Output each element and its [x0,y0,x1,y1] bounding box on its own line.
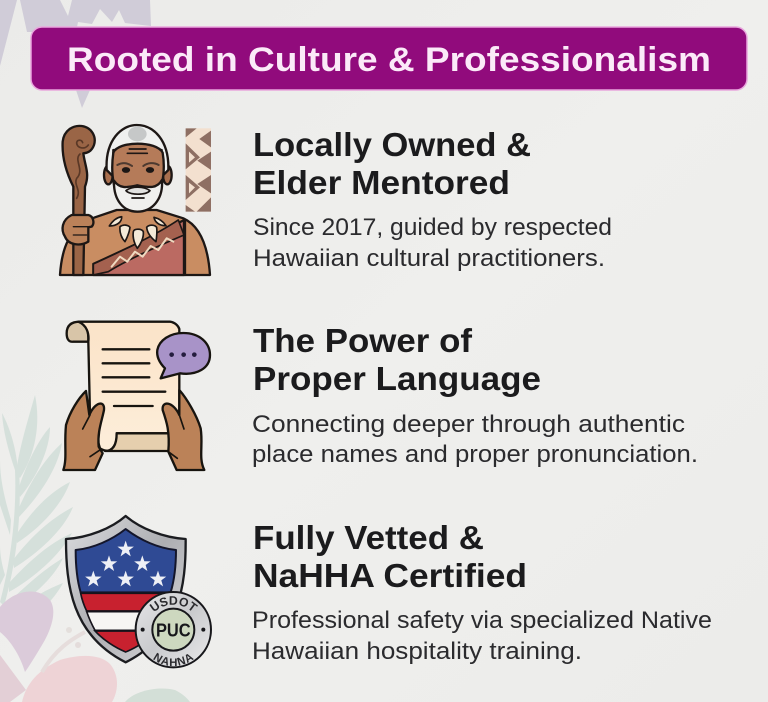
left hand [63,391,104,470]
title banner [31,27,747,90]
face [112,144,164,197]
staff [63,126,95,275]
arm line [181,220,188,275]
body: connecting deeper: Connecting deeper through authentic [252,411,685,438]
round PUC seal [134,591,212,668]
speech bubble [157,333,210,378]
shield frame [66,516,186,662]
body: professional safety: Professional safety via specialized Native [252,607,712,634]
section 1 text [253,126,612,272]
hand [63,215,93,244]
stripes [81,593,171,611]
section 2 text: place names and proper pronunciation. [252,441,698,468]
beard [114,180,162,212]
decorative palm frond [0,395,73,630]
bottom fold [105,433,169,451]
decorative hibiscus flower [0,592,190,702]
decorative top-left leaf [0,0,151,108]
round PUC seal: PUC [156,620,191,641]
red sash [93,220,184,275]
right hand [163,390,204,470]
section 3 text [252,519,712,665]
blue canton [76,529,176,592]
tooth necklace [109,217,166,248]
heading: locally owned: Locally Owned & [253,126,531,163]
body and shoulders [60,210,210,275]
stars [85,541,166,586]
heading: proper language: The Power of [253,322,473,359]
hair [107,125,168,177]
section 3 text: NaHHA Certified [253,557,527,594]
text lines [103,349,165,406]
round PUC seal: NAHNA [153,652,194,666]
body: since 2017: Since 2017, guided by respected [253,214,612,241]
section 2 text [252,322,698,468]
scroll curl [67,322,88,342]
title: Rooted in Culture & Professionalism [67,41,711,79]
icon: tribal pattern strip [186,128,211,212]
icon: Hawaiian elder with staff [60,125,210,275]
ears [104,166,113,184]
section 2 text: Proper Language [253,360,541,397]
icon: scroll held in hands with speech bubble [63,322,210,470]
round PUC seal: USDOT [149,596,198,611]
section 1 text: Elder Mentored [253,164,510,201]
section 3 text: Hawaiian hospitality training. [252,638,582,665]
icon: safety shield with stars and stripes [64,514,212,668]
section 1 text: Hawaiian cultural practitioners. [253,245,605,272]
paper [78,322,179,451]
heading: NaHHA certified: Fully Vetted & [253,519,484,556]
